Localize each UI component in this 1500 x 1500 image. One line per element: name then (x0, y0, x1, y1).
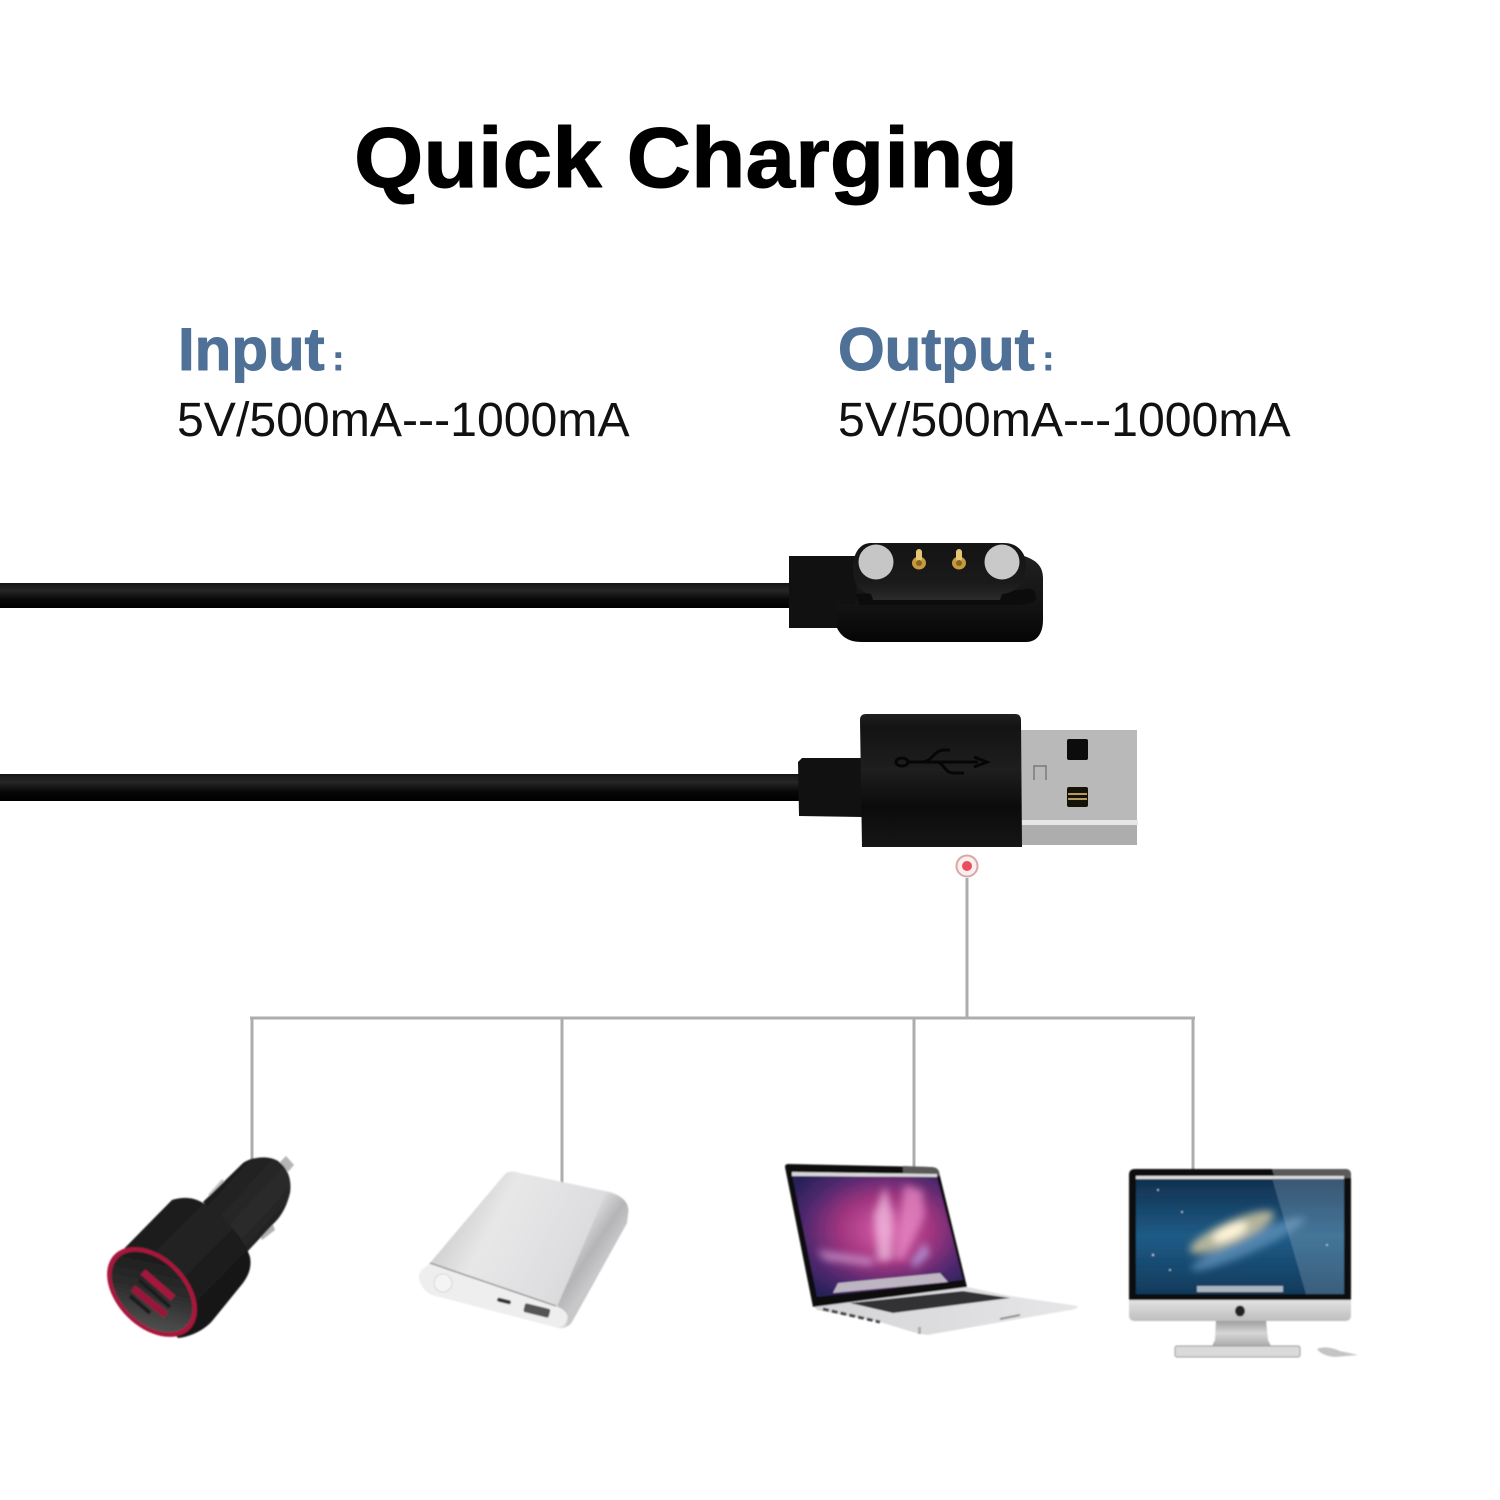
strain relief (789, 556, 864, 628)
mouse (1317, 1347, 1358, 1357)
contact window top (1067, 739, 1088, 760)
lid (785, 1164, 967, 1307)
pogo pin right (952, 549, 966, 570)
output heading: Output: (838, 316, 1054, 383)
branch to desktop (1192, 1018, 1194, 1170)
base (813, 1287, 1078, 1335)
connector base (837, 556, 1043, 642)
trackpad notch (1000, 1315, 1020, 1319)
icon: power bank (419, 1172, 628, 1328)
lid reflection (903, 1166, 940, 1176)
screen glare (1272, 1178, 1344, 1294)
keyboard (1175, 1346, 1300, 1357)
title: Quick Charging (354, 111, 1018, 206)
icon: car charger (90, 1156, 294, 1354)
branch bus (250, 1016, 1195, 1020)
stand (1212, 1320, 1271, 1346)
icon: laptop (785, 1164, 1078, 1335)
magnet left (858, 544, 894, 580)
bezel reflection (1272, 1169, 1351, 1178)
screen (1136, 1178, 1344, 1294)
connector base ledge (855, 588, 1036, 605)
front face (419, 1263, 568, 1327)
menu bar (792, 1172, 937, 1177)
magnet right (984, 544, 1020, 580)
trunk line (966, 878, 968, 1018)
front seam (430, 1263, 556, 1306)
branch to car charger (250, 1018, 254, 1162)
neck (203, 1157, 290, 1252)
body (110, 1198, 251, 1338)
stars (1152, 1189, 1328, 1271)
keyboard (850, 1291, 1010, 1313)
dock (1197, 1286, 1283, 1292)
ports (823, 1309, 880, 1322)
USB port lower (130, 1288, 166, 1315)
USB cable (0, 714, 1138, 847)
icon: desktop computer (1129, 1169, 1358, 1357)
collar (798, 758, 862, 817)
aurora rays (817, 1185, 930, 1268)
front notch (918, 1327, 921, 1334)
contact window bottom (1067, 787, 1088, 807)
pogo pin left (912, 549, 926, 570)
silver chin (1129, 1300, 1351, 1321)
USB port upper (139, 1272, 173, 1307)
USB overmould (860, 714, 1022, 847)
red ring (90, 1230, 214, 1354)
menu bar (1136, 1176, 1344, 1179)
input heading: Input: (178, 316, 344, 383)
output value: 5V/500mA---1000mA (838, 393, 1291, 447)
input specification (177, 316, 630, 447)
usb port (523, 1303, 551, 1318)
monitor bezel (1129, 1169, 1351, 1301)
USB trident logo (896, 750, 987, 773)
branch to laptop (912, 1018, 916, 1168)
side contact upper (208, 1179, 230, 1204)
dock (833, 1273, 948, 1293)
bank shell (419, 1172, 628, 1328)
connector tree (250, 878, 1195, 1186)
magnetic charging cable (0, 543, 1043, 642)
power button (434, 1274, 452, 1292)
output specification (838, 316, 1291, 447)
USB metal plug (1021, 730, 1138, 845)
metal tip (280, 1156, 294, 1172)
target dot (956, 856, 978, 876)
small stamp (1034, 766, 1046, 780)
input value: 5V/500mA---1000mA (177, 393, 630, 447)
branch to power bank (560, 1018, 564, 1186)
apple logo (1235, 1306, 1245, 1316)
cable wire (0, 774, 802, 801)
connector top pad (853, 543, 1026, 600)
cable wire (0, 583, 792, 608)
side contact lower (258, 1222, 275, 1240)
galaxy (1186, 1203, 1308, 1277)
screen (792, 1175, 963, 1297)
shaded right side (557, 1192, 628, 1326)
face (96, 1236, 208, 1348)
micro port (497, 1297, 511, 1305)
